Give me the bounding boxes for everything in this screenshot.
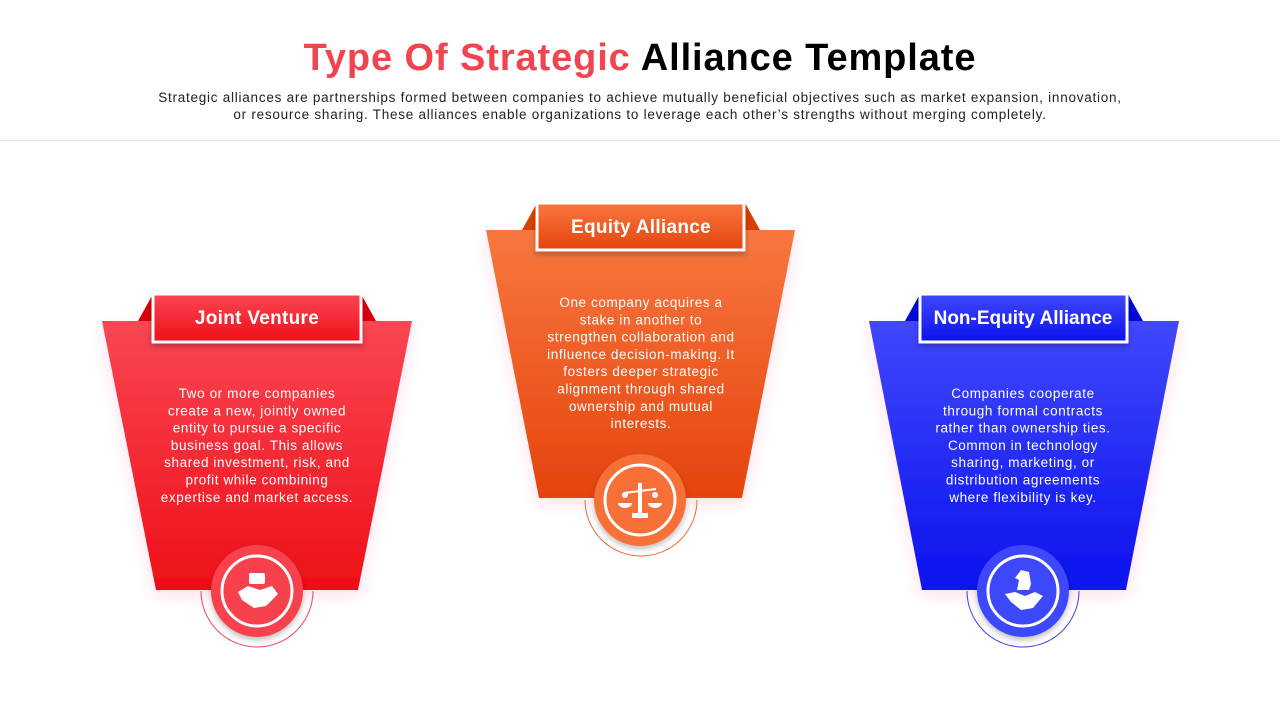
text: equity alliance description: stake in another to [580, 312, 702, 327]
heading: joint venture [153, 294, 361, 342]
text: non-equity alliance description: where flexibility is key. [948, 490, 1097, 505]
text: equity alliance description: fosters deeper strategic [563, 364, 719, 379]
text: joint venture description: profit while combining [185, 472, 329, 488]
title: Type Of Strategic Alliance Template [304, 37, 976, 79]
text: non-equity alliance description: through formal contracts [943, 403, 1103, 418]
heading: non-equity alliance [920, 294, 1127, 342]
text: non-equity alliance description: distribution agreements [946, 472, 1100, 488]
text: joint venture description: create a new, jointly owned [168, 403, 346, 418]
text: non-equity alliance description: Common in technology [948, 438, 1098, 453]
icon: handshake with briefcase [201, 545, 313, 647]
text: equity alliance description: interests. [611, 416, 671, 431]
text: joint venture description: Two or more companies [179, 386, 335, 401]
text: non-equity alliance description: sharing, marketing, or [951, 455, 1095, 470]
panel: non-equity alliance [869, 294, 1179, 647]
icon: chess knight handshake [967, 545, 1079, 647]
text: joint venture description: business goal. This allows [171, 438, 343, 453]
subtitle text: or resource sharing. These alliances enable organizations to leverage each other’s strengths without merging completely. [233, 107, 1047, 122]
text: equity alliance description: influence decision-making. It [547, 347, 735, 362]
heading: equity alliance: Equity Alliance [571, 217, 711, 238]
text: equity alliance description: One company acquires a [559, 295, 723, 310]
text: equity alliance description: strengthen collaboration and [547, 330, 735, 345]
text: non-equity alliance description: Companies cooperate [951, 386, 1095, 401]
icon: scales [585, 454, 697, 556]
text: joint venture description: entity to pursue a specific [173, 421, 341, 436]
text: joint venture description: shared investment, risk, and [164, 455, 350, 470]
heading: equity alliance [537, 203, 744, 250]
panel: joint venture [102, 294, 412, 647]
text: non-equity alliance description: rather than ownership ties. [935, 421, 1111, 436]
panel: equity alliance [486, 203, 795, 556]
text: joint venture description: expertise and market access. [161, 490, 353, 505]
text: equity alliance description: alignment through shared [557, 382, 725, 396]
text: equity alliance description: ownership and mutual [569, 399, 713, 414]
heading: non-equity alliance: Non-Equity Alliance [934, 308, 1112, 329]
subtitle text: Strategic alliances are partnerships formed between companies to achieve mutually beneficial objectives such as market expansion, innovation, [158, 90, 1122, 105]
subtitle text [158, 90, 1122, 122]
heading: joint venture: Joint Venture [195, 308, 319, 329]
